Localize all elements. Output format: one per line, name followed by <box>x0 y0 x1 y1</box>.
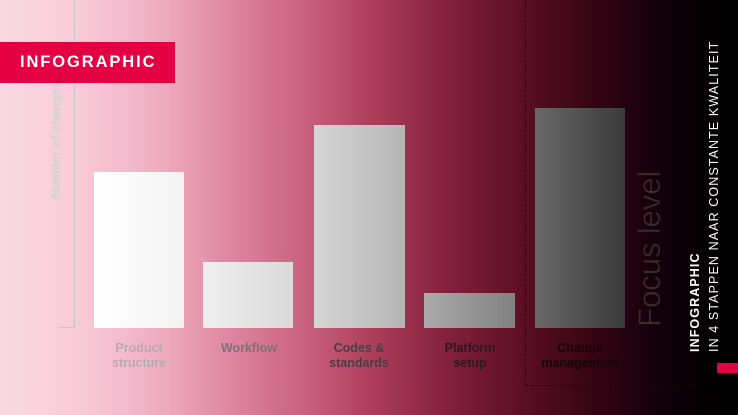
side caption: INFOGRAPHIC <box>688 252 702 352</box>
bar: platform setup <box>424 293 515 328</box>
title banner: INFOGRAPHIC <box>20 53 156 71</box>
label: platform setup: Platform <box>445 341 495 355</box>
bar: workflow <box>203 262 293 328</box>
y axis line <box>58 0 75 328</box>
side caption <box>688 41 721 352</box>
y axis label: Number of changes <box>49 81 63 198</box>
label: change management <box>541 341 619 370</box>
bar: codes and standards <box>314 125 405 328</box>
label: change management: Change <box>557 341 603 355</box>
side caption: IN 4 STAPPEN NAAR CONSTANTE KWALITEIT <box>707 41 721 352</box>
focus level label: Focus level <box>631 171 667 327</box>
bar: change management <box>535 108 625 328</box>
label: workflow: Workflow <box>221 341 277 355</box>
label: codes and standards <box>329 341 389 370</box>
red accent block <box>717 363 738 373</box>
label: codes and standards: Codes & <box>334 341 384 355</box>
label: product structure <box>112 341 166 370</box>
label: codes and standards: standards <box>329 356 389 370</box>
title banner <box>0 42 175 83</box>
focus area dashed outline <box>525 0 706 386</box>
label: product structure: Product <box>115 341 163 355</box>
bar: product structure <box>94 172 184 328</box>
label: platform setup: setup <box>453 356 487 370</box>
label: product structure: structure <box>112 356 166 370</box>
label: platform setup <box>445 341 495 370</box>
label: change management: management <box>541 356 619 370</box>
